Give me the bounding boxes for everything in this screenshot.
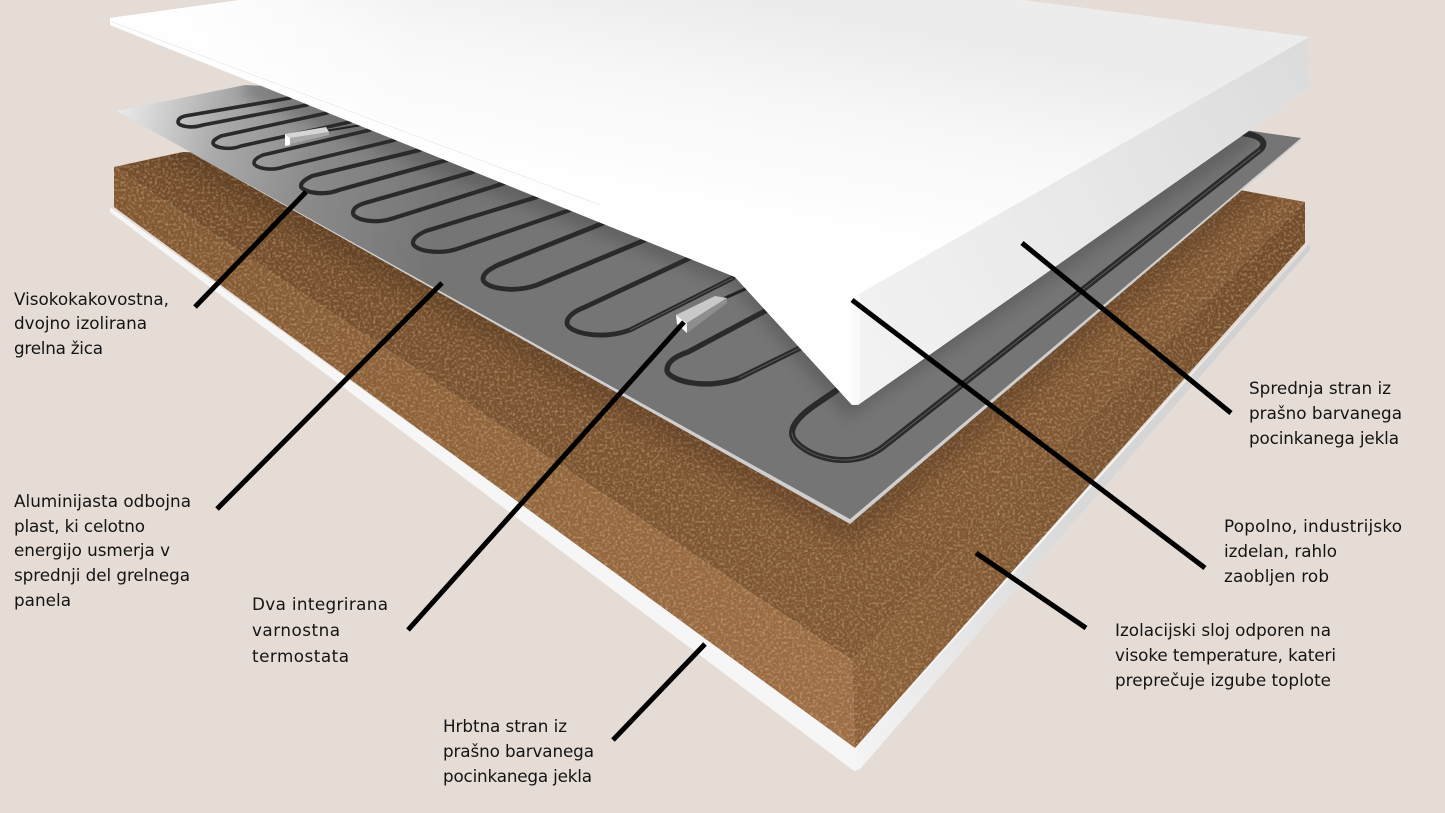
heating wire	[178, 98, 1263, 460]
label: insulation: Izolacijski sloj odporen na	[1115, 620, 1331, 640]
label: thermostats: varnostna	[252, 620, 340, 640]
thermostat: rear	[285, 127, 329, 146]
label: back sheet: prašno barvanega	[443, 741, 594, 761]
label: rounded edge: zaobljen rob	[1224, 566, 1329, 586]
label: front sheet: prašno barvanega	[1249, 403, 1402, 423]
label: front sheet: Sprednja stran iz	[1249, 378, 1391, 398]
label: insulation	[1115, 620, 1336, 690]
label: back sheet: pocinkanega jekla	[443, 766, 592, 786]
label: reflective layer: Aluminijasta odbojna	[14, 491, 191, 511]
label: front sheet	[1249, 378, 1402, 448]
panel: back sheet of powder coated steel	[110, 207, 1310, 771]
label: insulation: preprečuje izgube toplote	[1115, 670, 1331, 690]
label: reflective layer: panela	[14, 590, 71, 610]
panel: front sheet of powder coated steel	[110, 0, 1310, 405]
panel: insulation layer	[100, 114, 1320, 760]
label: rounded edge	[1224, 516, 1402, 586]
label: heating wire: Visokokakovostna,	[14, 289, 169, 309]
label: heating wire: dvojno izolirana	[14, 313, 147, 333]
thermostat: front	[676, 296, 727, 333]
leader lines	[195, 192, 1231, 740]
label: reflective layer: sprednji del grelnega	[14, 565, 190, 585]
label: rounded edge: Popolno, industrijsko	[1224, 516, 1402, 536]
label: reflective layer	[14, 491, 191, 610]
label: heating wire: grelna žica	[14, 338, 103, 358]
label: thermostats: Dva integrirana	[252, 594, 388, 614]
panel: aluminium reflective layer	[117, 85, 1301, 524]
label: back sheet	[443, 716, 594, 786]
label: insulation: visoke temperature, kateri	[1115, 645, 1336, 665]
label: thermostats: termostata	[252, 646, 349, 666]
label: back sheet: Hrbtna stran iz	[443, 716, 567, 736]
label: thermostats	[252, 594, 388, 666]
label: rounded edge: izdelan, rahlo	[1224, 541, 1337, 561]
label: reflective layer: energijo usmerja v	[14, 540, 170, 560]
label: front sheet: pocinkanega jekla	[1249, 428, 1399, 448]
label: reflective layer: plast, ki celotno	[14, 516, 145, 536]
label: heating wire	[14, 289, 169, 358]
